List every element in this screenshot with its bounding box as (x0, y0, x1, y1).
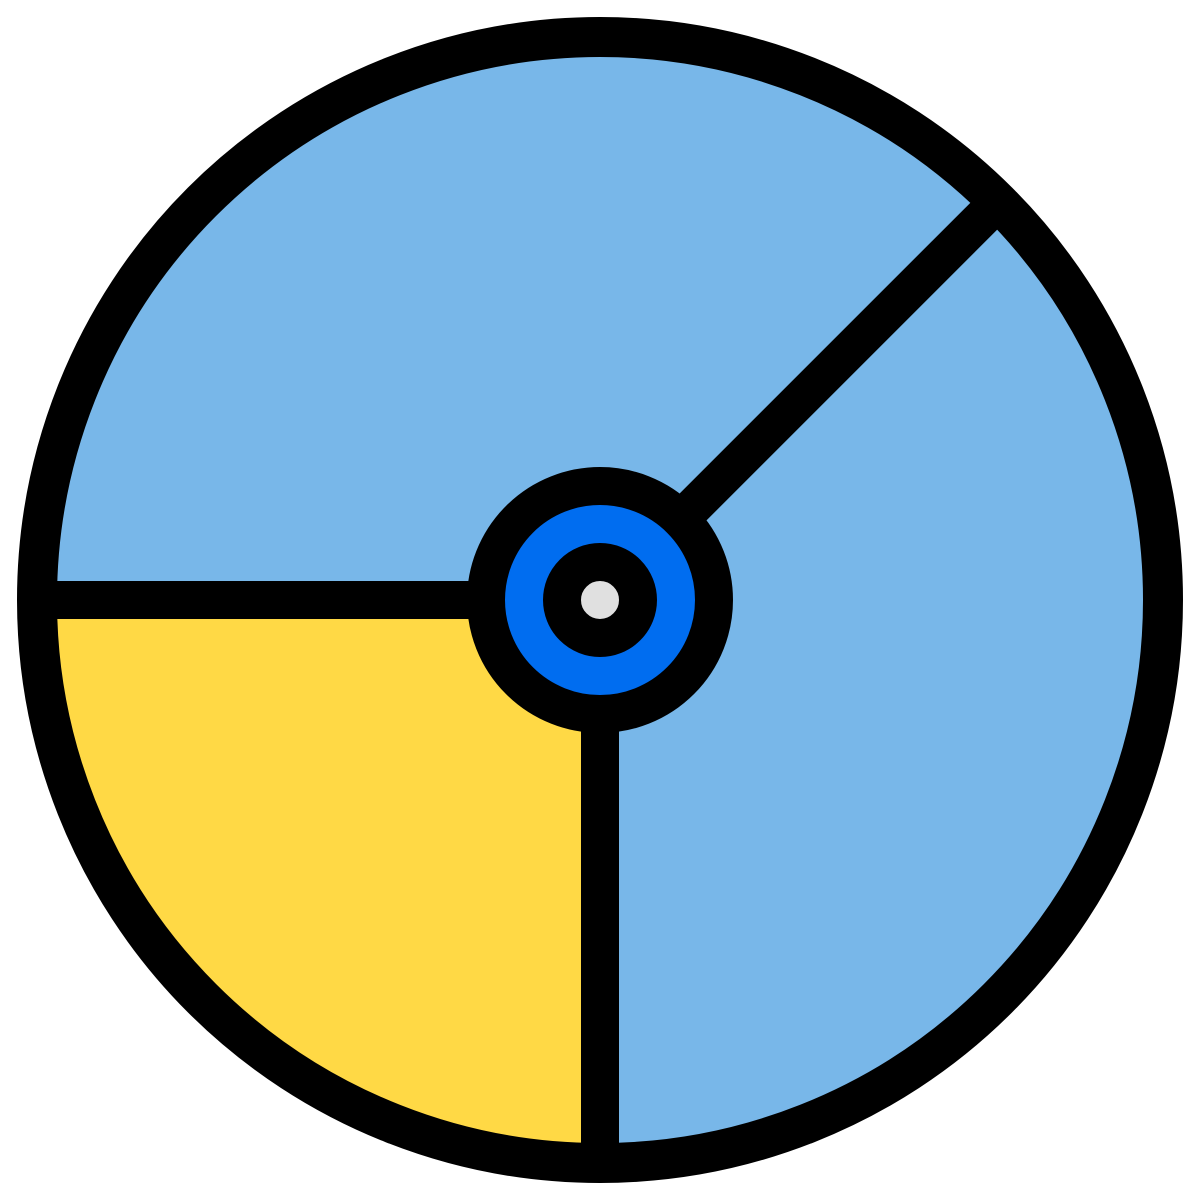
center hub (486, 486, 714, 714)
slice divider lines (37, 202, 998, 1163)
pie slice: yellow quadrant (37, 600, 600, 1163)
